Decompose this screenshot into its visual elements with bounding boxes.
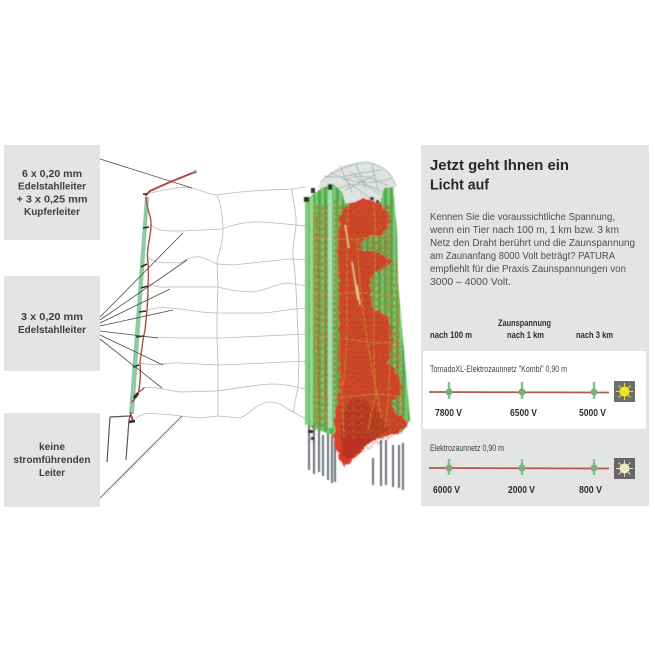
column headers: nach 100 m <box>430 330 472 341</box>
unrolled fence net <box>107 170 308 462</box>
panel: non-conducting label: keine <box>39 441 65 453</box>
panel: non-conducting label: stromführenden <box>14 454 90 466</box>
voltages: 5000 V <box>579 408 606 419</box>
voltages: 800 V <box>579 485 602 496</box>
ground stakes <box>309 425 403 490</box>
panel: voltage explanation <box>421 145 649 506</box>
body text: Netz den Draht berührt und die Zaunspannung <box>430 238 635 249</box>
red wire mass <box>335 199 407 467</box>
panel: stainless and copper conductors label: 6 x 0,20 mm <box>22 168 82 180</box>
panel: stainless conductors label <box>4 276 100 371</box>
heading <box>430 157 569 194</box>
left strand shading <box>312 205 330 428</box>
row title: TornadoXL-Elektrozaunnetz "Kombi" 0,90 m <box>430 364 567 375</box>
body text: am Zaunanfang 8000 Volt beträgt? PATURA <box>430 251 615 262</box>
voltages <box>435 408 606 419</box>
wire with posts <box>429 459 609 475</box>
panel: non-conducting label: Leiter <box>39 467 65 479</box>
net dome at top <box>318 162 396 205</box>
icon: dim sun <box>614 458 635 479</box>
panel: non-conducting label <box>4 413 100 507</box>
heading: Jetzt geht Ihnen ein <box>430 157 569 174</box>
row: standard net voltage <box>429 443 635 496</box>
green posts mass <box>305 184 410 436</box>
net horizontal wires <box>136 187 308 420</box>
red conductor wire <box>131 170 197 421</box>
body text: Kennen Sie die voraussichtliche Spannung, <box>430 212 615 223</box>
voltages: 6000 V <box>433 485 460 496</box>
wire with posts <box>429 382 609 399</box>
post caps <box>304 184 379 440</box>
net vertical wires <box>217 189 299 416</box>
ground spike <box>107 412 131 462</box>
column headers: nach 1 km <box>507 330 544 341</box>
body text: wenn ein Tier nach 100 m, 1 km bzw. 3 km <box>429 225 619 236</box>
column headers: Zaunspannung <box>498 318 551 329</box>
rolled-up fence net bundle <box>304 162 410 490</box>
heading: Licht auf <box>430 176 490 194</box>
panel: stainless conductors label: 3 x 0,20 mm <box>21 311 83 323</box>
front posts <box>307 188 330 428</box>
post clips <box>129 194 149 422</box>
column headers <box>430 318 613 341</box>
panel: stainless and copper conductors label <box>4 145 100 240</box>
body text: empfiehlt für die Praxis Zaunspannungen von <box>430 264 626 275</box>
row title: Elektrozaunnetz 0,90 m <box>430 443 504 454</box>
panel: stainless and copper conductors label: Edelstahlleiter <box>18 180 86 192</box>
leader lines <box>100 159 192 498</box>
fence post <box>129 197 149 414</box>
row: TornadoXL net voltage <box>423 351 646 429</box>
column headers: nach 3 km <box>576 330 613 341</box>
body text: 3000 – 4000 Volt. <box>430 277 511 288</box>
voltages: 7800 V <box>435 408 462 419</box>
voltages <box>433 485 602 496</box>
body text <box>429 212 635 288</box>
orange net strands <box>310 200 405 436</box>
red mesh texture <box>340 205 405 465</box>
panel: stainless and copper conductors label: + 3 x 0,25 mm <box>16 194 88 206</box>
panel: stainless and copper conductors label: Kupferleiter <box>24 206 80 218</box>
voltages: 2000 V <box>508 485 535 496</box>
icon: bright sun <box>614 381 635 402</box>
voltages: 6500 V <box>510 408 537 419</box>
pale inner strands <box>345 225 360 305</box>
panel: stainless conductors label: Edelstahlleiter <box>18 324 86 336</box>
